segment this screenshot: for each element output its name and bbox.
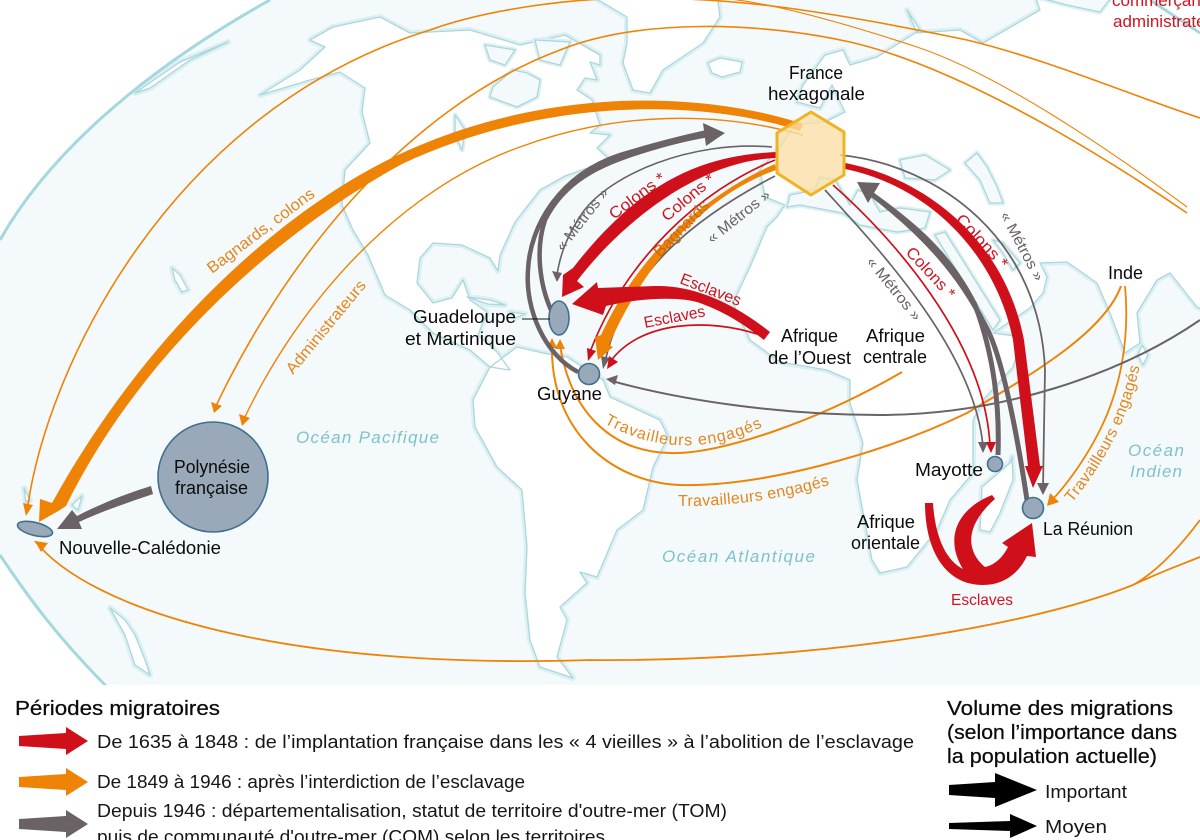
arrows: grey period xyxy=(57,123,1200,529)
arrow head xyxy=(606,375,618,385)
flow labels: Esclaves xyxy=(951,592,1013,609)
arrow head xyxy=(587,348,596,361)
place labels: Mayotte xyxy=(915,460,983,480)
legend text: depuis 1946: Depuis 1946 : départementalisation, statut de territoire d'outre-mer (TOM) xyxy=(97,801,727,821)
flow labels: « Métros » xyxy=(553,185,612,254)
flow labels: Bagnards xyxy=(651,197,713,261)
marker: Guadeloupe et Martinique xyxy=(549,301,569,335)
marker: Guyane xyxy=(578,364,600,384)
arrow: Esclaves Afrique orientale to La Réunion xyxy=(925,495,1036,585)
ocean labels: Indien xyxy=(1130,462,1182,481)
arrow: thin orange arc to French Polynesia xyxy=(215,26,1187,408)
ocean labels: Océan Pacifique xyxy=(296,428,439,447)
place labels: Afrique xyxy=(857,512,915,532)
arrow: heads at Guadeloupe xyxy=(547,338,565,349)
flow labels: Colons * xyxy=(659,171,719,225)
marker: Nouvelle-Calédonie xyxy=(16,518,54,540)
place labels: La Réunion xyxy=(1043,519,1133,539)
flow labels: Travailleurs engagés xyxy=(1064,366,1140,500)
arrow: thick Guadeloupe to France xyxy=(540,135,708,310)
arrow: inner workers arc to Guadeloupe xyxy=(560,345,902,453)
place labels xyxy=(59,63,1143,558)
flow labels: « Métros » xyxy=(704,187,774,247)
legend text: moyen: Moyen xyxy=(1045,817,1107,837)
ocean labels: Océan Atlantique xyxy=(662,547,815,566)
arrow: Bagnards to Guyane xyxy=(595,164,776,360)
flow labels: Esclaves xyxy=(678,271,743,310)
arrow: lower arc to Nouvelle-Calédonie xyxy=(35,520,1200,661)
arrow: thick Mayotte to France xyxy=(870,193,998,455)
flow labels: « Métros » xyxy=(863,254,925,324)
arrow: small heads xyxy=(23,402,250,552)
place labels: centrale xyxy=(863,347,927,367)
legend text: important: Important xyxy=(1045,782,1127,802)
flow labels xyxy=(204,0,1200,609)
flow labels: Travailleurs engagés xyxy=(678,476,828,506)
place labels: Polynésie xyxy=(174,457,250,477)
arrow: bagnards colons to Nouvelle-Calédonie xyxy=(39,101,803,522)
marker: Polynésie française xyxy=(158,422,268,532)
arrow head xyxy=(601,356,610,369)
flow labels: Colons * xyxy=(952,211,1011,272)
place labels: Guadeloupe xyxy=(413,307,516,327)
place labels: Afrique xyxy=(866,326,925,346)
leader line: Guadeloupe xyxy=(522,318,550,320)
arrow: Esclaves to Guyane xyxy=(610,325,760,362)
flow labels: Administrateurs xyxy=(283,277,370,378)
legend text: 1849-1946: De 1849 à 1946 : après l’interdiction de l’esclavage xyxy=(97,772,525,792)
heading: volume: (selon l’importance dans xyxy=(947,722,1177,744)
heading: volume: la population actuelle) xyxy=(947,746,1157,768)
place labels: Guyane xyxy=(537,384,602,404)
marker: La Réunion xyxy=(1022,498,1044,518)
panel: legend xyxy=(0,685,1200,840)
land masses xyxy=(24,0,1200,678)
place labels: française xyxy=(175,478,248,498)
heading: volume xyxy=(947,698,1177,768)
territories xyxy=(16,301,1044,540)
legend arrow: orange xyxy=(19,768,88,796)
place labels: Inde xyxy=(1108,263,1143,283)
arrow: administrateurs arc to French Polynesia xyxy=(243,118,803,421)
arrow head xyxy=(1037,483,1049,495)
place labels: hexagonale xyxy=(768,84,865,104)
legend arrow: moyen xyxy=(949,814,1037,838)
icon: France hexagon xyxy=(777,112,844,195)
arrow: Colons to La Réunion xyxy=(845,163,1043,488)
place labels: de l’Ouest xyxy=(768,348,851,368)
ocean labels xyxy=(296,428,1184,566)
arrow: Colons to Guyane xyxy=(590,160,775,352)
flow labels: « Métros » xyxy=(996,209,1047,284)
arrow head xyxy=(552,271,562,282)
arrow head xyxy=(978,442,988,453)
ocean labels: Océan xyxy=(1128,441,1184,460)
place labels: orientale xyxy=(851,533,920,553)
arrow: thin orange arcs across the top xyxy=(27,0,1200,512)
legend arrow: grey xyxy=(19,810,88,838)
arrow: outer workers arc to Guadeloupe xyxy=(552,286,1121,485)
arrow: Métros to Guadeloupe xyxy=(557,146,772,275)
legend arrow: important xyxy=(949,773,1037,807)
place labels: et Martinique xyxy=(405,329,516,349)
arrows: red period xyxy=(562,152,1043,585)
arrow: Métros to Mayotte xyxy=(825,190,983,447)
place labels: France xyxy=(789,63,843,83)
heading: volume: Volume des migrations xyxy=(947,698,1173,720)
heading: migration periods: Périodes migratoires xyxy=(15,698,220,720)
flow labels: Colons * xyxy=(606,170,669,223)
place labels: Nouvelle-Calédonie xyxy=(59,538,221,558)
arrow: Colons to Mayotte xyxy=(833,185,990,446)
arrow head: Réunion xyxy=(1047,493,1059,506)
arrow head: towards France west xyxy=(703,123,725,146)
flow labels: Bagnards, colons xyxy=(204,185,318,277)
arrow: Colons to Guadeloupe xyxy=(562,152,777,297)
arrow head xyxy=(986,442,996,453)
arrow: far right to Guyane xyxy=(612,320,1200,415)
marker: Mayotte xyxy=(988,456,1002,472)
flow labels: Travailleurs engagés xyxy=(608,414,762,446)
arrow: second thin arc xyxy=(720,0,1187,207)
arrow: Métros to Guyane xyxy=(605,176,775,362)
arrows: orange period xyxy=(23,0,1200,661)
arrow head: towards France east xyxy=(857,182,880,203)
flow labels: Esclaves xyxy=(643,303,707,332)
legend background xyxy=(0,685,1200,840)
legend arrow: red xyxy=(19,727,88,755)
arrow: thick Guyane to France xyxy=(528,132,708,372)
arrow: Métros to La Réunion xyxy=(840,155,1045,488)
arrow: Esclaves to Guadeloupe xyxy=(572,282,770,340)
arrow: Inde to La Réunion xyxy=(1051,286,1126,501)
place labels: Afrique xyxy=(781,326,838,346)
flow labels: Colons * xyxy=(902,244,958,303)
arrow: Polynésie to Nouvelle-Calédonie xyxy=(57,486,153,529)
arrow: thick La Réunion to France xyxy=(870,193,1027,500)
arrow head xyxy=(607,356,618,369)
legend text: 1635-1848: De 1635 à 1848 : de l’implantation française dans les « 4 vieilles » à l’abolition de l’esclavage xyxy=(97,732,914,752)
